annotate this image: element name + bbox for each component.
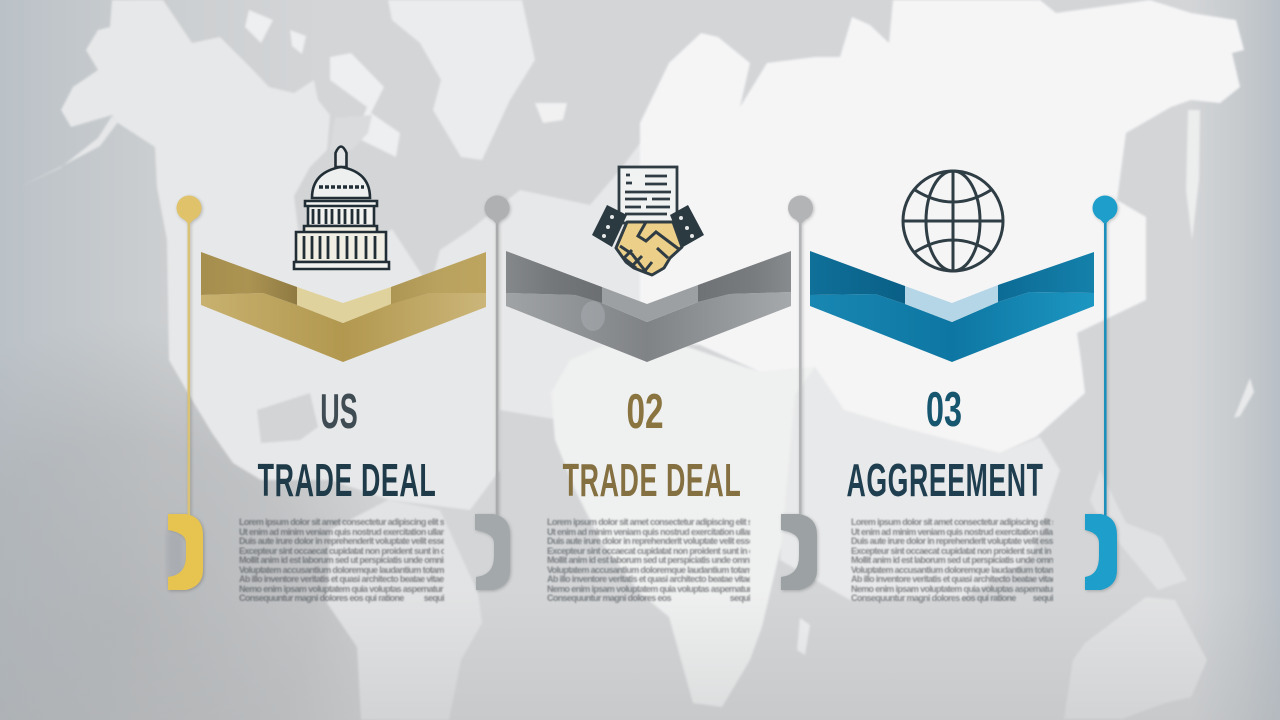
South America bbox=[327, 500, 482, 720]
paragraph bbox=[238, 518, 445, 604]
pin: blue bbox=[1084, 195, 1120, 592]
label: US: US bbox=[320, 384, 358, 438]
Japan arc bbox=[1234, 378, 1254, 418]
pin: gold bbox=[166, 195, 206, 592]
Greenland bbox=[388, 0, 535, 160]
heading: trade deal: TRADE DEAL bbox=[563, 454, 741, 506]
column 1: US trade deal bbox=[166, 145, 486, 604]
Africa bbox=[551, 330, 815, 707]
chevron: grey bbox=[506, 251, 791, 362]
heading: trade deal: TRADE DEAL bbox=[257, 454, 436, 506]
Eurasia bbox=[640, 0, 1244, 453]
North America bbox=[61, 0, 500, 510]
label: 03: 03 bbox=[926, 383, 962, 437]
icon: capitol building bbox=[292, 145, 390, 270]
Madagascar bbox=[797, 618, 810, 655]
Indian ocean area bbox=[780, 367, 1060, 600]
paragraph bbox=[850, 518, 1054, 604]
Aleutian arc bbox=[22, 116, 118, 186]
Hudson bay bbox=[330, 115, 372, 150]
column 3: 03 agreement bbox=[780, 170, 1120, 604]
Europe and Atlantic haze bbox=[470, 130, 660, 420]
chevron: gold bbox=[201, 252, 486, 362]
pin: grey bbox=[474, 195, 512, 592]
Iceland bbox=[535, 103, 567, 123]
chevron: blue bbox=[810, 251, 1094, 362]
icon: globe bbox=[902, 170, 1004, 272]
column 2: 02 trade deal bbox=[474, 166, 791, 604]
Gulf of Mexico bbox=[257, 393, 318, 443]
Arctic islands bbox=[245, 10, 400, 157]
Kamchatka strip bbox=[1186, 110, 1200, 240]
heading: agreement: AGGREEMENT bbox=[846, 454, 1044, 506]
pin: grey divider bbox=[780, 195, 820, 592]
Australia bbox=[1064, 597, 1207, 719]
paragraph bbox=[546, 518, 751, 604]
label: 02: 02 bbox=[626, 385, 664, 439]
icon: handshake and document bbox=[592, 166, 704, 276]
Southeast Asia islands bbox=[1090, 470, 1187, 590]
